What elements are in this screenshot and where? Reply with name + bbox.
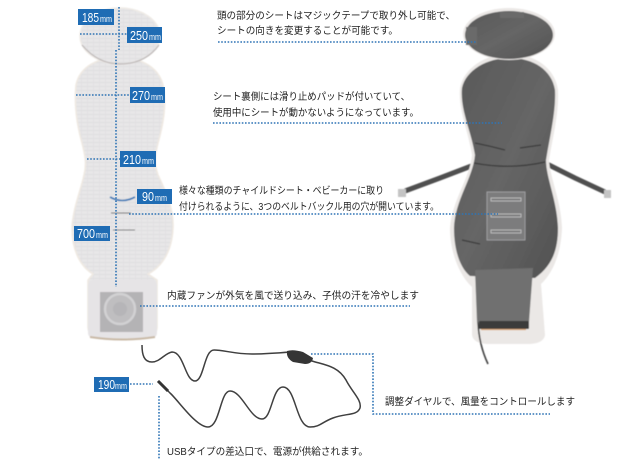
text: anti-slip pad: 使用中にシートが動かないようになっています。: [213, 106, 419, 119]
label: 270 mm: mm: [151, 92, 163, 102]
text: dial: 調整ダイヤルで、風量をコントロールします: [385, 395, 575, 408]
label: 190 mm: 190: [98, 377, 115, 392]
belt slots: [110, 197, 135, 230]
text: head sheet: [217, 9, 455, 37]
USB cable with dial: [142, 345, 360, 427]
callout line: dial: [311, 354, 550, 414]
clear pocket: [487, 192, 525, 240]
fan pocket: [88, 280, 157, 340]
left strap: [398, 165, 474, 197]
text: belt holes: 付けられるように、3つのベルトバックル用の穴が開いています。: [179, 200, 439, 213]
label: 270 mm: [130, 87, 165, 103]
dial: [287, 350, 313, 364]
label: 210 mm: 210: [123, 152, 141, 167]
label: 90 mm: mm: [155, 193, 167, 203]
label: 190 mm: [94, 377, 129, 392]
text: USB: USBタイプの差込口で、電源が供給されます。: [167, 445, 368, 458]
head pad backing: [463, 8, 555, 60]
label: 250 mm: mm: [149, 32, 161, 42]
label: 700 mm: mm: [96, 230, 108, 240]
right strap: [545, 163, 611, 198]
label: 190 mm: mm: [115, 381, 127, 391]
label: 270 mm: 270: [132, 88, 150, 103]
text: anti-slip pad: シート裏側には滑り止めパッドが付いていて、: [213, 90, 410, 103]
label: 700 mm: 700: [77, 226, 95, 241]
head pad: [465, 11, 553, 59]
label: 250 mm: 250: [130, 28, 148, 43]
callout line: fan: [140, 305, 410, 307]
text: belt holes: 様々な種類のチャイルドシート・ベビーカーに取り: [179, 184, 384, 197]
callout line: belt holes: [129, 213, 498, 215]
seat headrest: [80, 8, 160, 64]
text: head sheet: シートの向きを変更することが可能です。: [217, 24, 398, 37]
USB plug: [158, 381, 168, 391]
callout line: head sheet: [218, 41, 476, 43]
text: fan: 内蔵ファンが外気を風で送り込み、子供の汗を冷やします: [167, 289, 419, 302]
back panel: [454, 58, 558, 278]
label: 185 mm: 185: [82, 10, 99, 25]
text: head sheet: 頭の部分のシートはマジックテープで取り外し可能で、: [217, 9, 455, 22]
callout line: USB: [158, 396, 160, 460]
label: 185 mm: [78, 9, 114, 25]
photo: mesh seat sheet front: [72, 8, 173, 340]
label: 90 mm: 90: [142, 189, 154, 204]
light backing: [450, 54, 562, 344]
back cable: [478, 322, 488, 364]
label: 210 mm: [120, 151, 156, 167]
label: 90 mm: [137, 189, 172, 204]
label: 250 mm: [127, 27, 162, 43]
fan flap: [475, 268, 533, 330]
fold lines: [462, 143, 545, 244]
text: belt holes: [179, 184, 439, 213]
text: anti-slip pad: [213, 90, 419, 119]
callout line: anti-slip pad: [213, 122, 502, 124]
seat body: [72, 57, 173, 339]
label: 185 mm: mm: [100, 14, 112, 24]
photo: seat sheet back: [398, 8, 611, 364]
dimension guide lines: [76, 7, 153, 384]
label: 700 mm: [74, 226, 110, 241]
label: 210 mm: mm: [142, 156, 154, 166]
